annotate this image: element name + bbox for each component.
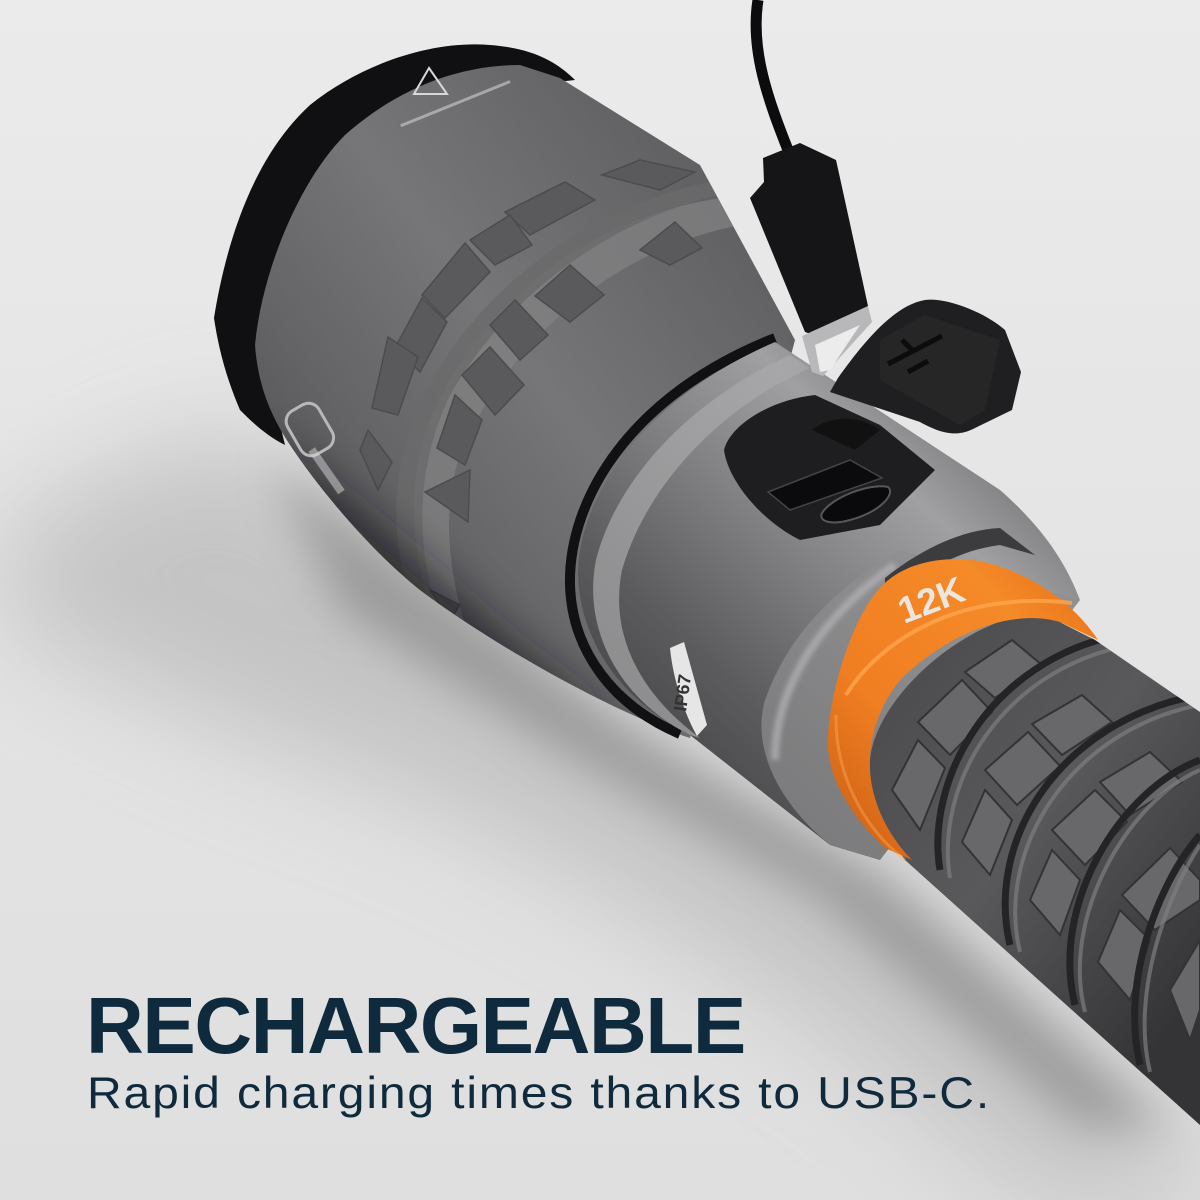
IP67 rating badge: IP67	[670, 673, 695, 713]
rubber port flap with USB symbol	[830, 300, 1021, 433]
IP67 rating badge	[670, 642, 707, 736]
subheading: Rapid charging times thanks to USB-C.	[87, 1069, 991, 1118]
charging port panel	[724, 395, 935, 540]
12K ring marking: 12K	[892, 569, 970, 631]
orange ring	[828, 559, 1098, 860]
seam between head and neck	[570, 338, 775, 734]
fin blocks	[360, 160, 702, 620]
USB-C cable	[750, 0, 872, 376]
flashlight head bezel	[214, 44, 575, 445]
warning label and markings on head	[282, 68, 511, 494]
heading: RECHARGEABLE	[86, 981, 745, 1070]
USB-C connector	[750, 143, 868, 334]
flashlight head body	[240, 50, 810, 750]
flashlight neck section	[578, 342, 1080, 860]
flashlight knurled handle	[860, 605, 1200, 1130]
